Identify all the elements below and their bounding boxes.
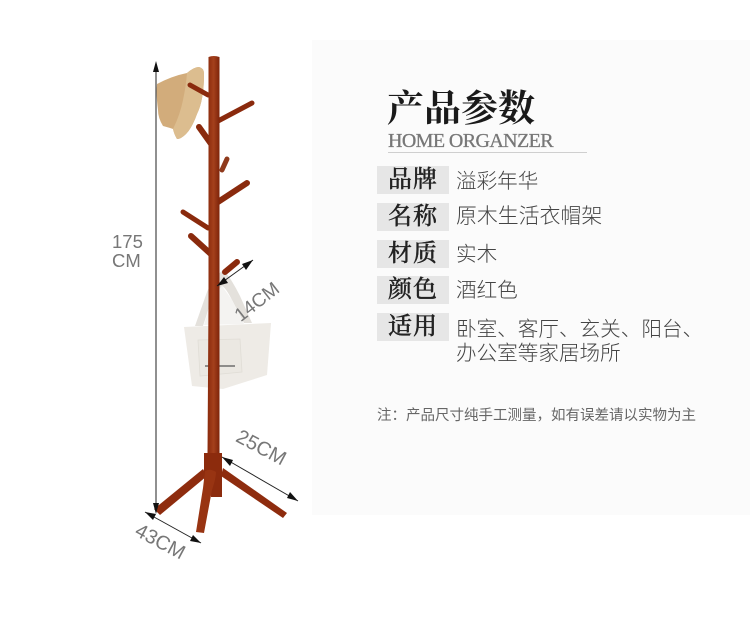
dimension: 25CM: 25CM	[232, 426, 290, 470]
row: usage: 办公室等家居场所	[456, 342, 621, 365]
row: material: 材质	[388, 241, 438, 267]
branches	[183, 85, 252, 272]
dimension: 43CM: 43CM	[131, 520, 189, 564]
row: color: 颜色	[388, 277, 438, 303]
row: name	[377, 203, 602, 231]
arrow: height	[153, 61, 159, 514]
row: brand: 溢彩年华	[456, 170, 538, 193]
row: name: 原木生活衣帽架	[456, 205, 602, 228]
subtitle: HOME ORGANZER	[388, 130, 553, 152]
dimension: 14CM: 14CM	[231, 279, 284, 326]
coat rack	[154, 56, 287, 533]
row: usage: 适用	[388, 314, 438, 340]
dimension: 175 CM: 175	[112, 231, 143, 252]
dimension: 175 CM: CM	[112, 250, 141, 271]
row: usage	[377, 313, 703, 365]
row: color: 酒红色	[456, 279, 518, 302]
row: brand	[377, 166, 538, 194]
pole	[208, 56, 220, 455]
note: 注：产品尺寸纯手工测量，如有误差请以实物为主	[377, 408, 696, 424]
row: usage: 卧室、客厅、玄关、阳台、	[456, 318, 703, 341]
collar	[204, 453, 222, 497]
arrow: base width	[145, 512, 201, 543]
arrow: hook spacing	[217, 260, 253, 286]
divider under subtitle	[388, 152, 587, 153]
hat	[157, 67, 204, 139]
row: material: 实木	[456, 243, 497, 266]
row: color	[377, 276, 518, 304]
arrow: base depth	[222, 457, 298, 501]
panel: parameters background	[312, 40, 750, 515]
row: material	[377, 240, 497, 268]
legs	[154, 468, 287, 518]
row: name: 名称	[388, 204, 438, 230]
title: 产品参数	[387, 89, 535, 130]
row: brand: 品牌	[388, 167, 438, 193]
dimension: 175 CM	[112, 231, 143, 271]
handbag	[184, 270, 271, 389]
